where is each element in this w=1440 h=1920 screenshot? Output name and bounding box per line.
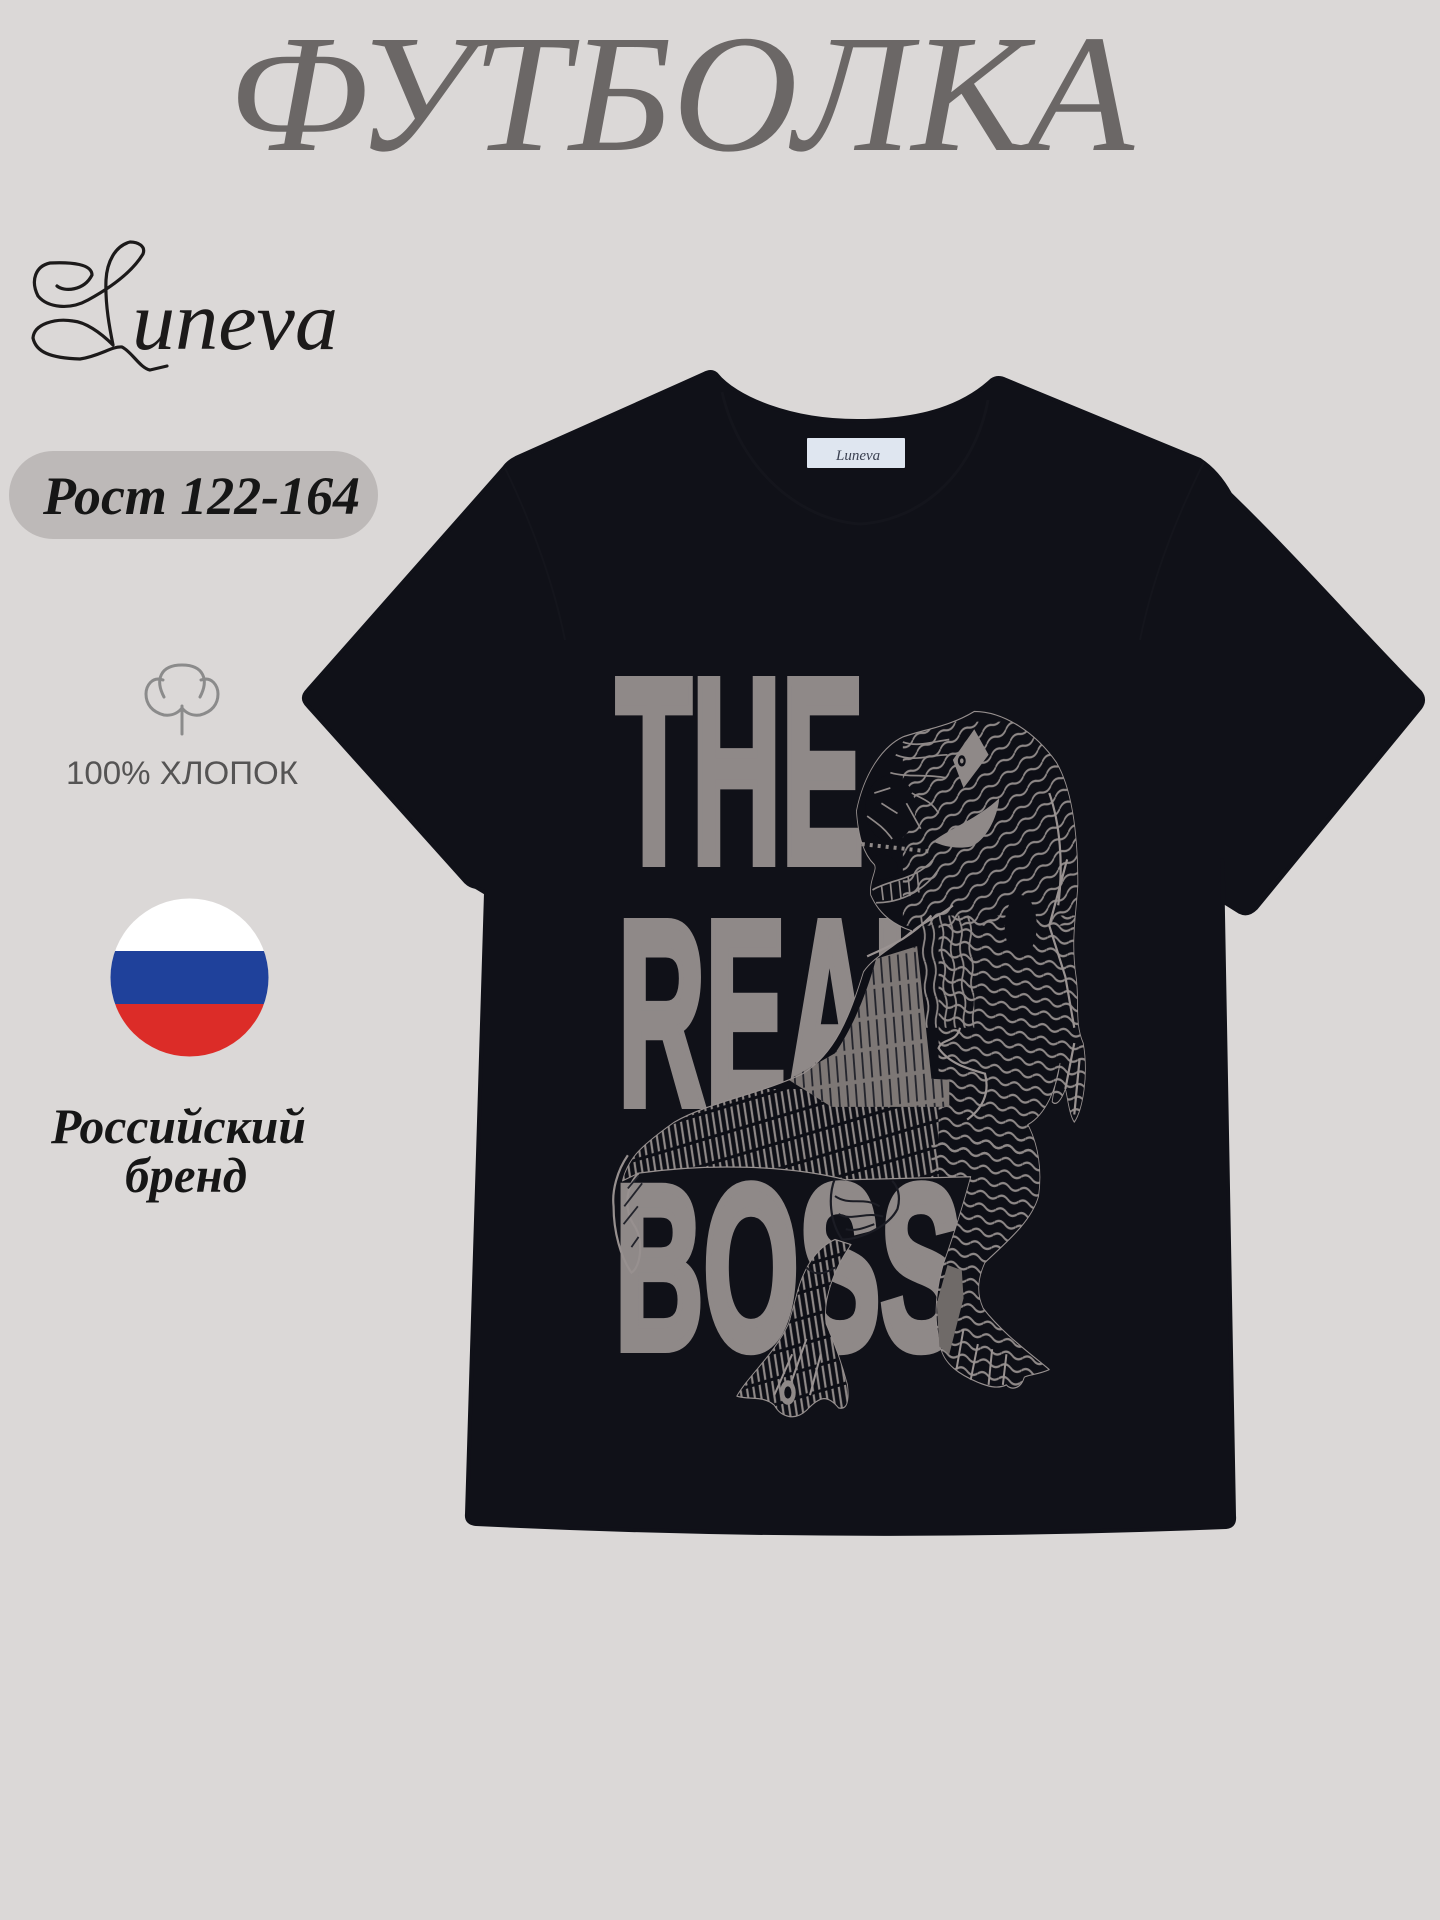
dinosaur texture fills bbox=[617, 722, 1089, 1421]
back contour detail bbox=[867, 793, 1080, 1120]
t-shirt: REAL bbox=[618, 866, 947, 1160]
print: slogan bbox=[615, 624, 962, 1398]
collar and seams bbox=[722, 392, 988, 524]
neck label: Luneva bbox=[835, 448, 880, 464]
feet detail bbox=[774, 1329, 1006, 1395]
print: slogan: THE bbox=[616, 624, 864, 918]
silhouette outline bbox=[622, 711, 1085, 1417]
t-shirt bbox=[304, 372, 1423, 1534]
teeth bbox=[862, 844, 931, 852]
neck patch bbox=[933, 798, 999, 848]
brand origin text: бренд bbox=[125, 1147, 247, 1203]
tail tip outline bbox=[613, 1155, 640, 1273]
title: ФУТБОЛКА bbox=[228, 1, 1135, 187]
icon: cotton boll bbox=[146, 665, 218, 734]
print: slogan: BOSS bbox=[615, 1138, 962, 1398]
height badge bbox=[9, 451, 378, 539]
dark snout and mouth bbox=[902, 780, 916, 838]
right S overlap bbox=[937, 1265, 964, 1354]
print: tyrannosaurus bbox=[613, 711, 1089, 1421]
grey overlap of letter L bbox=[789, 946, 949, 1107]
jaw and head detail bbox=[867, 739, 949, 903]
logo: Luneva script bbox=[33, 242, 338, 370]
shirt body bbox=[304, 372, 1423, 1534]
left thigh outline bbox=[831, 1178, 899, 1239]
material label: 100% ХЛОПОК bbox=[66, 755, 298, 791]
icon: Russian flag bbox=[110, 898, 268, 1056]
neck label bbox=[807, 438, 905, 468]
dinosaur silhouette bbox=[622, 711, 1085, 1417]
brand origin text bbox=[50, 1098, 306, 1203]
brand origin text: Российский bbox=[50, 1098, 306, 1154]
eye patch bbox=[953, 729, 989, 788]
height badge: Рост 122-164 bbox=[42, 466, 360, 526]
foot toe bbox=[780, 1380, 796, 1405]
